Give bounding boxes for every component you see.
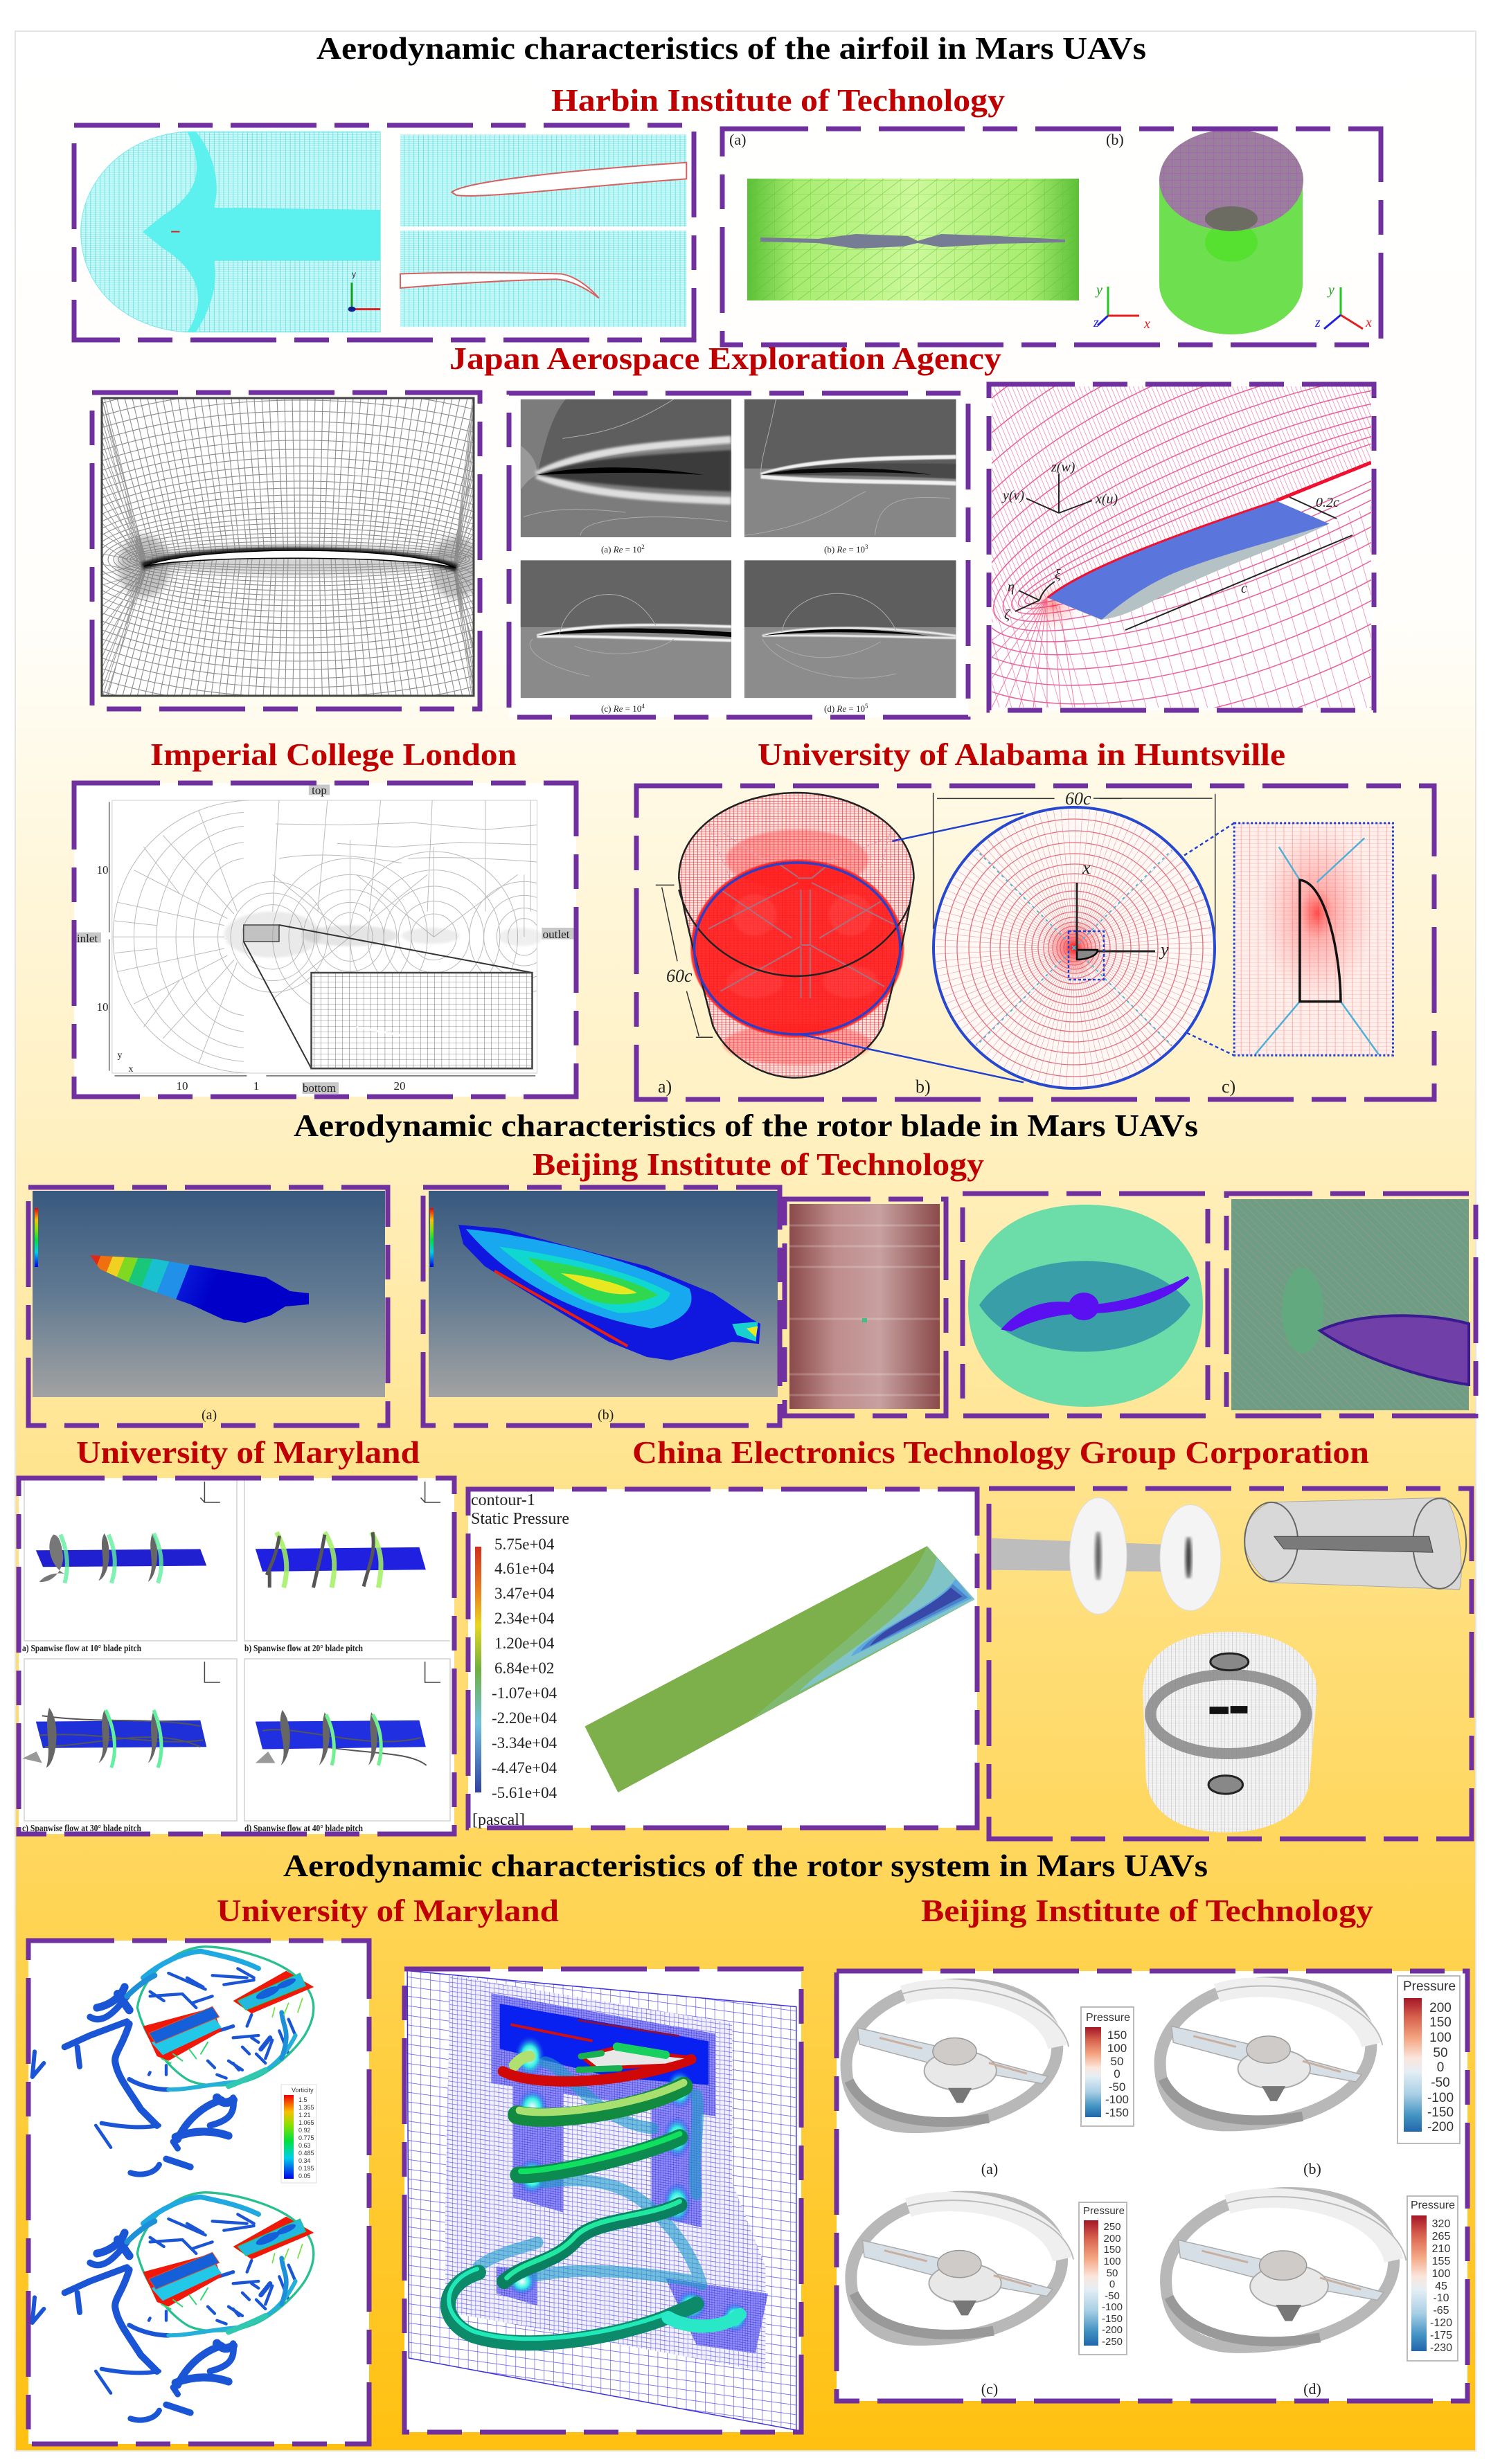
panel: Alabama mesh: 60c — [1065, 789, 1091, 809]
legend b: -100 — [1427, 2091, 1454, 2105]
subplot b — [256, 1482, 440, 1588]
panel: spanwise flow: a) Spanwise flow at 10° blade pitch — [22, 1644, 141, 1654]
panel: Harbin rotor domain — [729, 129, 1372, 334]
legend c: -250 — [1102, 2336, 1123, 2348]
vorticity legend: 0.92 — [298, 2127, 311, 2134]
red rotor tube — [503, 2020, 694, 2081]
legend c: 200 — [1103, 2233, 1121, 2245]
border: Harbin mesh — [74, 125, 694, 340]
legend: -2.20e+04 — [492, 1709, 557, 1727]
panel: Harbin rotor domain: z — [1314, 315, 1321, 330]
border: Reynolds number contours — [509, 393, 968, 717]
border: static pressure — [468, 1489, 977, 1828]
panel: Harbin rotor domain: (a) — [729, 131, 746, 148]
legend c: -200 — [1102, 2324, 1123, 2336]
panel: Alabama mesh: x — [1082, 858, 1091, 878]
panel: Harbin rotor domain: x — [1365, 315, 1372, 330]
border: rotor in green domain — [963, 1194, 1208, 1416]
panel: Reynolds number contours: 4 — [641, 703, 645, 710]
panel: static pressure — [468, 1489, 977, 1829]
legend a: Pressure — [1086, 2012, 1130, 2024]
legend b — [1398, 1976, 1460, 2143]
legend a: 150 — [1107, 2029, 1127, 2042]
subplot a — [36, 1482, 220, 1583]
heading: University of Maryland (blade): University of Maryland — [76, 1435, 420, 1470]
legend d: 210 — [1432, 2243, 1450, 2255]
heading: University of Maryland (rotor): University of Maryland — [217, 1893, 559, 1928]
legend d: 100 — [1432, 2268, 1450, 2280]
panel: JAXA 3D wing mesh: y(v) — [1001, 488, 1024, 503]
axes and dimensions — [1015, 474, 1352, 630]
zoomed airfoil box — [1234, 823, 1393, 1055]
panel: tall cylinder mesh — [789, 1204, 940, 1409]
heading: Beijing Institute of Technology (rotor): Beijing Institute of Technology — [921, 1893, 1373, 1928]
legend b: -200 — [1427, 2120, 1454, 2134]
panel: CETC meshes — [992, 1498, 1466, 1833]
panel: Imperial mesh — [74, 783, 579, 1097]
panel: blade stress: (b) — [598, 1408, 614, 1423]
wing blade — [1047, 501, 1329, 620]
legend c: -50 — [1105, 2290, 1120, 2302]
panel: Harbin airfoil mesh — [81, 132, 686, 332]
panel: JAXA 3D wing mesh: 0.2c — [1316, 495, 1339, 510]
legend d: 155 — [1432, 2256, 1450, 2267]
legend d — [1407, 2196, 1458, 2361]
legend c: -100 — [1102, 2301, 1123, 2313]
airfoil — [144, 550, 456, 568]
border: blade displacement — [28, 1187, 388, 1426]
panel: Harbin rotor domain: z — [1093, 315, 1099, 330]
legend a: -100 — [1105, 2093, 1129, 2106]
panel: spanwise flow — [19, 1478, 454, 1834]
contour b — [744, 399, 956, 537]
vorticity legend: 1.355 — [298, 2104, 314, 2111]
panel: Imperial mesh: top — [312, 784, 327, 797]
legend: 5.75e+04 — [494, 1536, 555, 1553]
legend a: 50 — [1111, 2055, 1123, 2068]
vorticity legend: 1.5 — [298, 2096, 307, 2103]
legend b: -150 — [1427, 2105, 1454, 2120]
panel: Harbin rotor domain: y — [1327, 282, 1334, 298]
panel: Alabama mesh — [656, 789, 1393, 1097]
legend: -5.61e+04 — [492, 1784, 557, 1801]
panel: Reynolds number contours — [509, 393, 968, 717]
title: rotor system section: Aerodynamic characteristics of the rotor system in Mars UAVs — [283, 1849, 1208, 1883]
panel: Reynolds number contours: (d) Re = 10 — [824, 703, 865, 714]
vorticity legend: 0.63 — [298, 2142, 311, 2149]
panel: Reynolds number contours: (a) Re = 10 — [601, 544, 641, 555]
legend b: -50 — [1431, 2076, 1450, 2090]
legend a: 0 — [1114, 2067, 1121, 2080]
cylinder domain — [1244, 1498, 1466, 1590]
legend: contour-1 — [471, 1491, 535, 1509]
legend d: Pressure — [1411, 2200, 1455, 2211]
vorticity legend: Vorticity — [292, 2087, 314, 2094]
panel: JAXA 3D wing mesh — [992, 386, 1371, 710]
legend c: Pressure — [1083, 2205, 1125, 2217]
vorticity legend: 0.485 — [298, 2150, 314, 2157]
panel: Imperial mesh: 10 — [176, 1079, 188, 1092]
legend d: 265 — [1432, 2231, 1450, 2242]
legend c: 50 — [1107, 2267, 1118, 2279]
contour d — [744, 560, 956, 698]
legend b: 200 — [1429, 2001, 1452, 2015]
isosurface c — [851, 2197, 1073, 2340]
legend c: 250 — [1103, 2221, 1121, 2233]
legend — [471, 1491, 569, 1829]
legend a — [1081, 2007, 1134, 2126]
panel: blade displacement: (a) — [202, 1408, 217, 1423]
panel: Imperial mesh: x — [129, 1064, 133, 1074]
panel: Imperial mesh: 1 — [253, 1079, 259, 1092]
subplot c — [22, 1662, 220, 1768]
panel: Imperial mesh: 10 — [97, 863, 108, 876]
legend b: 150 — [1429, 2015, 1452, 2030]
legend c: 100 — [1103, 2256, 1121, 2267]
border: rotor pressure isosurfaces — [837, 1971, 1467, 2401]
legend d: -65 — [1433, 2305, 1449, 2317]
legend: Static Pressure — [471, 1510, 569, 1528]
border: blade stress — [423, 1187, 780, 1426]
mesh plane — [407, 1971, 796, 2430]
legend: 1.20e+04 — [494, 1635, 555, 1652]
isosurface d — [1166, 2193, 1407, 2347]
panel: blade displacement — [33, 1191, 385, 1423]
panel: blade close-up mesh — [1231, 1199, 1469, 1410]
axis labels: y — [352, 269, 356, 279]
contour a — [521, 399, 731, 537]
legend d: -230 — [1430, 2342, 1452, 2354]
panel: Reynolds number contours: 2 — [641, 543, 645, 550]
panel: Imperial mesh: y — [118, 1050, 122, 1061]
title: rotor blade section: Aerodynamic characteristics of the rotor blade in Mars UAVs — [294, 1108, 1198, 1143]
legend: [pascal] — [472, 1811, 525, 1829]
large domain — [1143, 1632, 1317, 1833]
vorticity legend: 0.195 — [298, 2165, 314, 2172]
panel: JAXA structured mesh — [101, 397, 475, 696]
cylinder — [1159, 129, 1303, 334]
heading: JAXA: Japan Aerospace Exploration Agency — [449, 341, 1001, 376]
panel: Alabama mesh: c) — [1222, 1077, 1235, 1097]
legend: 6.84e+02 — [494, 1660, 554, 1677]
panel: Harbin rotor domain: y — [1095, 282, 1102, 298]
panel: Alabama mesh: a) — [658, 1077, 672, 1097]
heading: Beijing Institute of Technology: Beijing Institute of Technology — [533, 1146, 984, 1182]
border: vortex helix mesh — [404, 1969, 801, 2432]
end glows — [508, 2035, 748, 2332]
contour c — [521, 560, 731, 698]
legend a: 100 — [1107, 2042, 1127, 2055]
legend c: 0 — [1109, 2278, 1115, 2290]
legend b: 100 — [1429, 2031, 1452, 2045]
panel: Reynolds number contours: (b) Re = 10 — [824, 544, 865, 555]
pressure plate — [584, 1546, 974, 1792]
legend d: -175 — [1430, 2330, 1452, 2341]
panel: Alabama mesh: b) — [916, 1077, 931, 1097]
panel: Alabama mesh: y — [1159, 939, 1169, 960]
border: Harbin rotor domain — [722, 129, 1381, 345]
legend a: -150 — [1105, 2106, 1129, 2119]
panel: blade stress — [429, 1191, 778, 1423]
legend: 2.34e+04 — [494, 1610, 555, 1627]
legend: -4.47e+04 — [492, 1759, 557, 1777]
legend: 4.61e+04 — [494, 1560, 555, 1577]
legend c — [1079, 2202, 1127, 2355]
panel: rotor pressure isosurfaces: (c) — [981, 2380, 998, 2398]
panel: Alabama mesh: 60c — [666, 966, 693, 986]
heading: CETC: China Electronics Technology Group Corporation — [632, 1435, 1369, 1470]
legend d: -120 — [1430, 2317, 1452, 2329]
inset — [312, 973, 532, 1068]
legend d: 320 — [1432, 2218, 1450, 2230]
border: JAXA 3D wing mesh — [989, 384, 1374, 710]
cylinder mesh — [679, 793, 914, 1078]
blade with discs — [992, 1498, 1221, 1615]
vorticity legend: 0.34 — [298, 2157, 311, 2164]
isosurface b — [1160, 1983, 1382, 2125]
panel: Reynolds number contours: 3 — [865, 543, 868, 550]
heading: Harbin Institute of Technology: Harbin Institute of Technology — [551, 82, 1005, 118]
legend a: -50 — [1109, 2080, 1125, 2094]
panel: Reynolds number contours: 5 — [865, 703, 868, 710]
panel: Harbin rotor domain: (b) — [1106, 131, 1124, 148]
panel: JAXA 3D wing mesh: ζ — [1004, 607, 1011, 622]
panel: spanwise flow: c) Spanwise flow at 30° blade pitch — [22, 1824, 141, 1834]
panel: Imperial mesh: 20 — [393, 1079, 406, 1092]
helix tubes — [448, 2083, 740, 2343]
border: vorticity — [28, 1941, 369, 2444]
panel: Harbin rotor domain: x — [1143, 316, 1150, 332]
border: Imperial mesh — [74, 783, 576, 1097]
panel: rotor pressure isosurfaces: (d) — [1303, 2380, 1321, 2398]
axes — [1098, 287, 1363, 329]
panel: rotor in green domain — [968, 1205, 1203, 1407]
vorticity legend: 1.065 — [298, 2119, 314, 2126]
border: spanwise flow — [19, 1478, 454, 1834]
border: tall cylinder mesh — [785, 1199, 946, 1416]
faint tubes — [479, 2062, 702, 2285]
vorticity legend: 0.775 — [298, 2134, 314, 2141]
legend b: 50 — [1433, 2046, 1448, 2060]
panel: Imperial mesh: outlet — [543, 928, 570, 941]
legend b: 0 — [1437, 2060, 1444, 2075]
panel: JAXA 3D wing mesh: z(w) — [1051, 460, 1075, 475]
isosurface a — [846, 1984, 1069, 2127]
vorticity legend — [281, 2085, 316, 2183]
panel: vorticity — [28, 1941, 369, 2444]
vorticity legend: 1.21 — [298, 2112, 311, 2119]
panel: rotor pressure isosurfaces: (a) — [981, 2160, 998, 2177]
heading: Imperial College London: Imperial College London — [150, 737, 517, 772]
border: CETC meshes — [989, 1489, 1472, 1839]
panel: Imperial mesh: 10 — [97, 1000, 108, 1014]
panel: JAXA 3D wing mesh: η — [1008, 579, 1015, 595]
panel: rotor pressure isosurfaces: (b) — [1303, 2160, 1321, 2177]
vorticity legend: 0.05 — [298, 2173, 311, 2179]
legend c: -150 — [1102, 2313, 1123, 2325]
legend d: -10 — [1433, 2292, 1449, 2304]
legend: -3.34e+04 — [492, 1734, 557, 1752]
panel: Reynolds number contours: (c) Re = 10 — [601, 703, 641, 714]
heading: University of Alabama in Huntsville: University of Alabama in Huntsville — [758, 737, 1285, 772]
airfoil halo — [143, 551, 456, 568]
title: airfoil section: Aerodynamic characteristics of the airfoil in Mars UAVs — [316, 31, 1146, 66]
subplot d — [256, 1662, 440, 1765]
border: Alabama mesh — [636, 786, 1434, 1099]
panel: spanwise flow: b) Spanwise flow at 20° blade pitch — [244, 1644, 363, 1654]
circular mesh — [934, 807, 1215, 1088]
panel: Imperial mesh: inlet — [77, 932, 98, 945]
legend: 3.47e+04 — [494, 1585, 555, 1602]
border: blade close-up mesh — [1226, 1194, 1476, 1416]
panel: JAXA 3D wing mesh: c — [1241, 581, 1247, 596]
panel: vortex helix mesh — [404, 1969, 801, 2432]
legend c: 150 — [1103, 2244, 1121, 2256]
panel: rotor pressure isosurfaces — [837, 1971, 1467, 2401]
border: JAXA structured mesh — [92, 393, 480, 709]
domain mesh — [113, 800, 579, 1073]
panel: JAXA 3D wing mesh: ξ — [1055, 567, 1061, 582]
legend d: 45 — [1435, 2281, 1447, 2292]
panel: JAXA 3D wing mesh: x(u) — [1095, 492, 1118, 507]
panel: spanwise flow: d) Spanwise flow at 40° blade pitch — [244, 1824, 363, 1834]
legend: -1.07e+04 — [492, 1684, 557, 1702]
legend b: Pressure — [1403, 1979, 1456, 1994]
panel: Imperial mesh: bottom — [303, 1081, 336, 1095]
